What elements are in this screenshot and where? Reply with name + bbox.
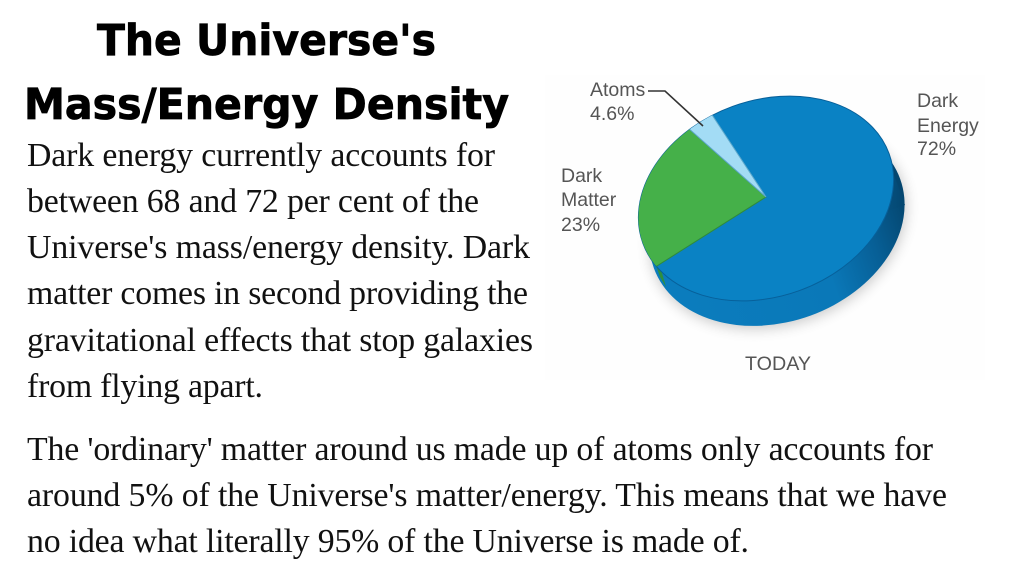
chart shadow xyxy=(621,89,935,363)
leader line: atoms xyxy=(648,91,703,126)
title: The Universe's xyxy=(97,16,436,66)
label: atoms xyxy=(590,79,646,125)
label: dark energy: 72% xyxy=(917,138,956,160)
text block: dark energy and dark matter: matter comes in second providing the xyxy=(27,275,528,312)
text block: ordinary matter: The 'ordinary' matter around us made up of atoms only accounts for xyxy=(27,431,933,468)
text block: dark energy and dark matter: from flying apart. xyxy=(27,368,263,405)
label: atoms: 4.6% xyxy=(590,103,634,125)
slice: dark matter xyxy=(638,129,767,267)
text block: dark energy and dark matter: gravitational effects that stop galaxies xyxy=(27,322,533,359)
slice: atoms xyxy=(689,115,766,198)
title: Mass/Energy Density xyxy=(24,80,509,130)
chart background xyxy=(545,75,985,380)
text block: dark energy and dark matter: Dark energy currently accounts for xyxy=(27,137,495,174)
text block: dark energy and dark matter: between 68 and 72 per cent of the xyxy=(27,183,479,220)
text block: ordinary matter: around 5% of the Universe's matter/energy. This means that we have xyxy=(27,477,947,514)
pie side wall xyxy=(620,87,934,360)
label: dark matter: 23% xyxy=(561,214,600,236)
label: atoms: Atoms xyxy=(590,79,646,101)
title xyxy=(24,16,509,130)
label: today: TODAY xyxy=(745,353,811,375)
label: dark energy: Dark xyxy=(917,90,958,112)
pie chart xyxy=(561,62,979,375)
label: dark energy: Energy xyxy=(917,115,979,137)
text block: ordinary matter: no idea what literally 95% of the Universe is made of. xyxy=(27,523,749,560)
text block: ordinary matter xyxy=(27,431,947,560)
text block: dark energy and dark matter: Universe's mass/energy density. Dark xyxy=(27,229,530,266)
label: dark energy xyxy=(917,90,979,160)
text block: dark energy and dark matter xyxy=(27,137,533,405)
label: dark matter xyxy=(561,165,617,236)
label: dark matter: Matter xyxy=(561,189,617,211)
label: dark matter: Dark xyxy=(561,165,602,187)
pie top: dark energy slice xyxy=(609,62,923,335)
